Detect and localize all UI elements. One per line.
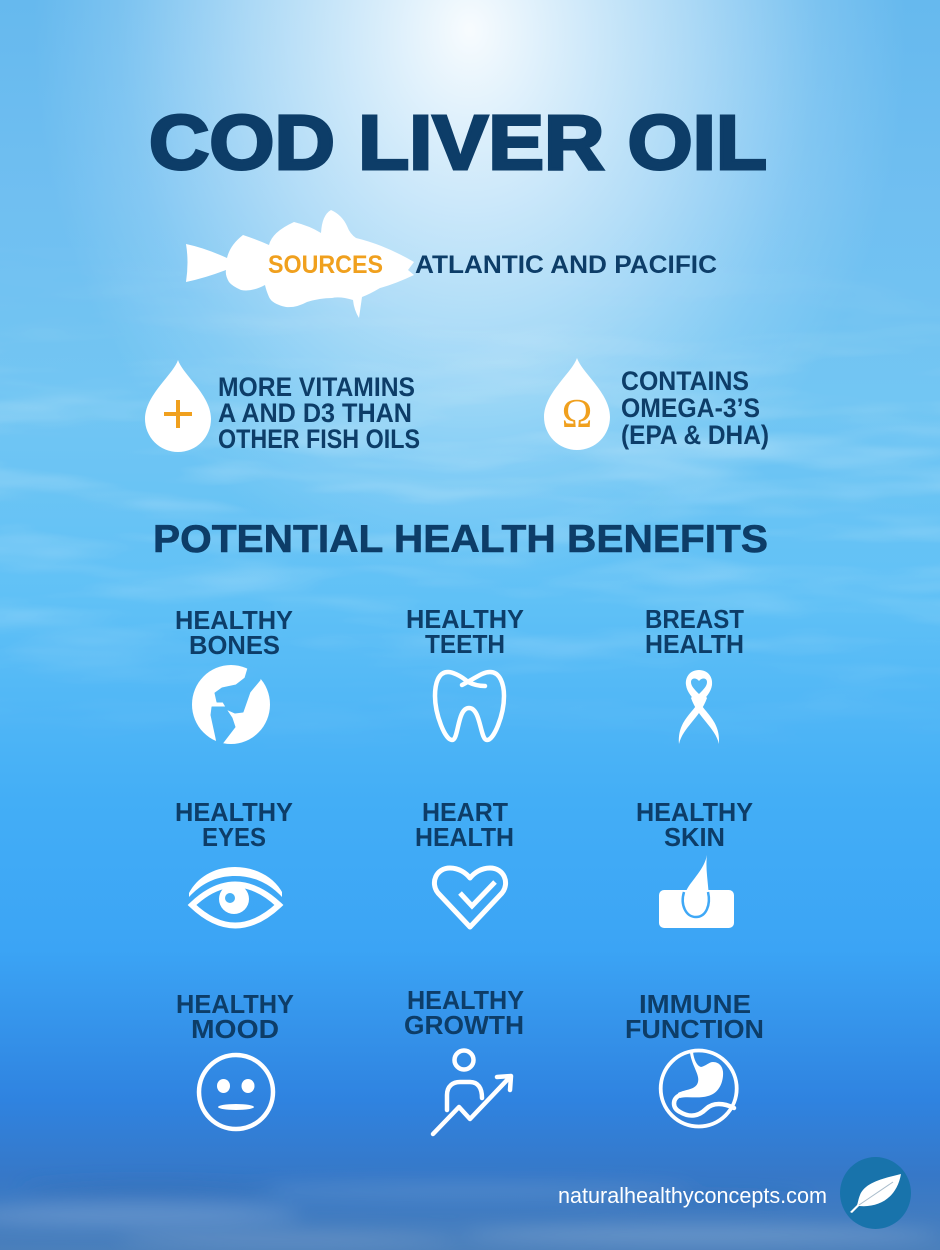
omega text: CONTAINS — [621, 366, 749, 396]
benefit: healthy growth — [404, 985, 524, 1134]
benefit: healthy mood: MOOD — [191, 1014, 279, 1044]
title: COD LIVER OIL — [149, 100, 767, 186]
icon: ribbon — [679, 670, 719, 744]
benefit: breast health: BREAST — [645, 604, 744, 634]
benefit: healthy mood: HEALTHY — [176, 989, 294, 1019]
benefit: heart health: HEART — [422, 797, 508, 827]
omega text: OMEGA-3’S — [621, 393, 760, 423]
benefit: healthy skin — [636, 797, 753, 928]
benefit: immune function — [625, 989, 764, 1126]
benefit: breast health — [645, 604, 744, 744]
benefit: immune function: FUNCTION — [625, 1014, 764, 1044]
heading: potential health benefits: POTENTIAL HEALTH BENEFITS — [153, 518, 768, 561]
icon: hair follicle — [659, 855, 734, 928]
icon: neutral face — [199, 1055, 273, 1129]
logo: leaf badge — [840, 1157, 911, 1229]
benefit: heart health — [415, 797, 514, 927]
sources value: ATLANTIC AND PACIFIC — [415, 251, 717, 279]
benefit: healthy eyes — [175, 797, 293, 926]
vitamins text: A AND D3 THAN — [218, 398, 412, 428]
benefit: healthy bones — [175, 605, 293, 750]
icon: eye — [189, 867, 282, 926]
benefit: healthy eyes: EYES — [202, 822, 266, 852]
icon: drop with omega: Ω — [562, 390, 592, 436]
benefit: healthy skin: HEALTHY — [636, 797, 753, 827]
vitamins fact — [145, 360, 420, 454]
benefit: healthy bones: HEALTHY — [175, 605, 293, 635]
sources row — [186, 210, 717, 318]
benefit: heart health: HEALTH — [415, 822, 514, 852]
benefit: healthy bones: BONES — [189, 630, 280, 660]
icon: stomach — [661, 1050, 737, 1126]
omega text: (EPA & DHA) — [621, 420, 769, 450]
icon: heart with check — [434, 868, 506, 927]
benefit: healthy skin: SKIN — [664, 822, 725, 852]
benefit: immune function: IMMUNE — [639, 989, 751, 1019]
vitamins text: MORE VITAMINS — [218, 372, 415, 402]
icon: drop with omega — [544, 358, 610, 450]
omega fact — [544, 358, 769, 450]
icon: bone — [192, 665, 270, 744]
website url: naturalhealthyconcepts.com — [558, 1183, 827, 1208]
icon: drop with plus — [145, 360, 211, 452]
icon: person with rising arrow — [433, 1050, 511, 1134]
website footer — [558, 1157, 911, 1229]
icon: tooth — [435, 672, 504, 740]
omega text — [621, 366, 769, 450]
icon: cod fish — [186, 210, 414, 318]
vitamins text — [218, 372, 420, 454]
benefit: healthy growth: HEALTHY — [407, 985, 524, 1015]
benefit: healthy teeth: HEALTHY — [406, 604, 524, 634]
vitamins text: OTHER FISH OILS — [218, 424, 420, 454]
benefit: healthy growth: GROWTH — [404, 1010, 524, 1040]
benefit: breast health: HEALTH — [645, 629, 744, 659]
benefit: healthy teeth: TEETH — [425, 629, 505, 659]
benefit: healthy teeth — [406, 604, 524, 740]
sources label: SOURCES — [268, 251, 383, 279]
benefit: healthy eyes: HEALTHY — [175, 797, 293, 827]
benefit: healthy mood — [176, 989, 294, 1129]
